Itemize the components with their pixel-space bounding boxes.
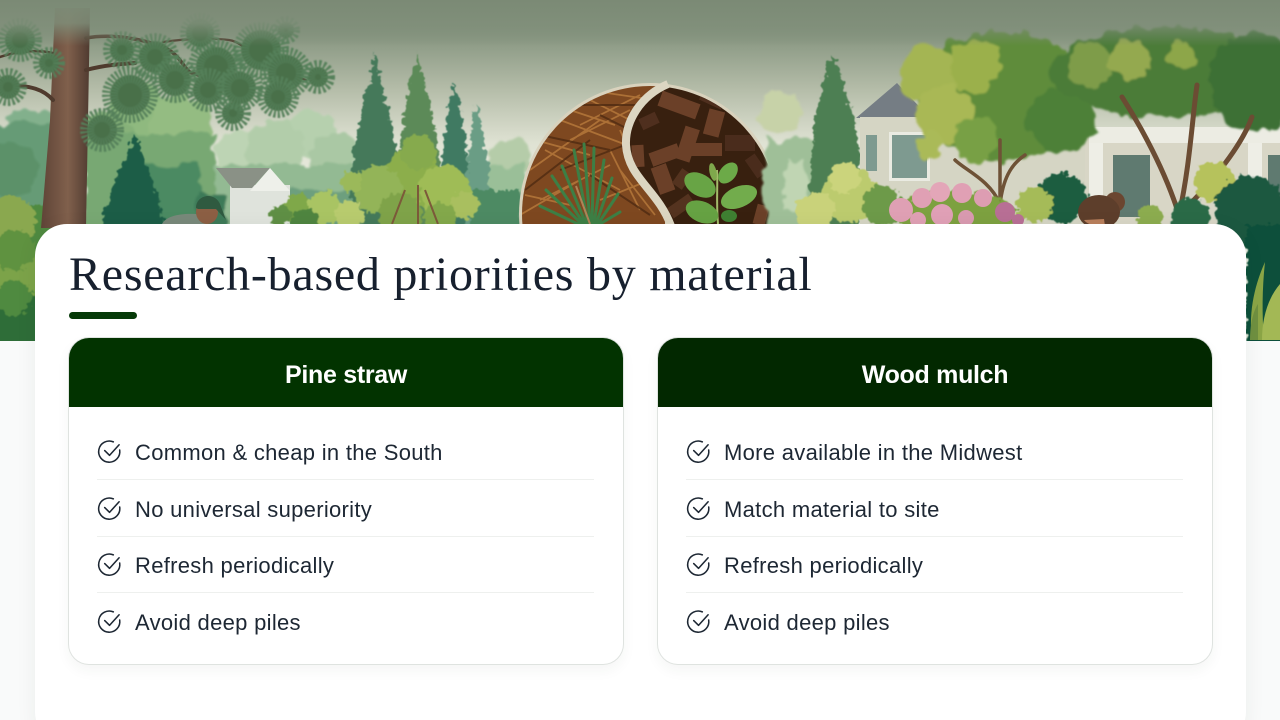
title accent bar bbox=[69, 312, 137, 319]
dark conifer bbox=[101, 133, 165, 228]
item: match material to site bbox=[686, 497, 1183, 537]
young tree bbox=[342, 134, 479, 237]
material circle: pine straw and wood mulch bbox=[519, 80, 770, 224]
dark and yellow shrubs bbox=[1017, 162, 1280, 345]
cypress trees bbox=[351, 52, 492, 230]
large house bbox=[856, 83, 1280, 227]
item: more available in the midwest: More available in the Midwest bbox=[724, 440, 1023, 465]
hero illustration: garden scene bbox=[0, 0, 1280, 341]
sky bbox=[0, 0, 1280, 341]
left foreground bush bbox=[0, 196, 52, 350]
pink flowering shrub bbox=[889, 182, 1024, 236]
item: avoid deep piles: Avoid deep piles bbox=[724, 610, 890, 635]
pine branches bbox=[0, 36, 306, 100]
item: refresh periodically: Refresh periodically bbox=[135, 553, 334, 578]
title: Research-based priorities by material bbox=[69, 248, 812, 301]
panel heading: wood mulch: Wood mulch bbox=[862, 361, 1008, 389]
panel: wood mulch bbox=[658, 338, 1212, 664]
item: common and cheap: Common & cheap in the South bbox=[135, 440, 443, 465]
item: avoid deep piles: Avoid deep piles bbox=[135, 610, 301, 635]
left background forest bbox=[0, 85, 532, 235]
item: no universal superiority bbox=[97, 497, 594, 537]
gardener bbox=[162, 196, 226, 224]
panel heading: pine straw: Pine straw bbox=[285, 361, 407, 389]
distant white house bbox=[216, 168, 290, 226]
cypress right of circle bbox=[806, 55, 860, 228]
item: refresh periodically bbox=[97, 553, 594, 593]
item: refresh periodically bbox=[686, 553, 1183, 593]
item: refresh periodically: Refresh periodically bbox=[724, 553, 923, 578]
pine sprig bbox=[540, 144, 620, 224]
pine needle clusters bbox=[0, 19, 328, 145]
leaf sprout bbox=[680, 159, 761, 228]
item: match material to site: Match material to site bbox=[724, 497, 940, 522]
shrub beside gardener bbox=[269, 191, 364, 236]
white content sheet bbox=[35, 224, 1246, 720]
panel: pine straw bbox=[69, 338, 623, 664]
panel heading: wood mulch bbox=[658, 338, 1212, 407]
grass clump right bbox=[1250, 262, 1280, 340]
item: common and cheap bbox=[97, 440, 594, 480]
yellow-green shrub bbox=[795, 162, 902, 232]
item: more available in the midwest bbox=[686, 440, 1183, 480]
right tree trunks bbox=[955, 85, 1252, 215]
panel heading: pine straw bbox=[69, 338, 623, 407]
fading tree tops bbox=[0, 0, 1280, 46]
woman with bun bbox=[1078, 192, 1125, 229]
right shade tree foliage bbox=[900, 27, 1280, 162]
far trees right of circle bbox=[758, 90, 816, 230]
lower bushes behind young tree bbox=[470, 190, 520, 230]
pine trunk bbox=[41, 8, 90, 228]
item: no universal superiority: No universal superiority bbox=[135, 497, 372, 522]
young tree trunks bbox=[392, 185, 438, 224]
